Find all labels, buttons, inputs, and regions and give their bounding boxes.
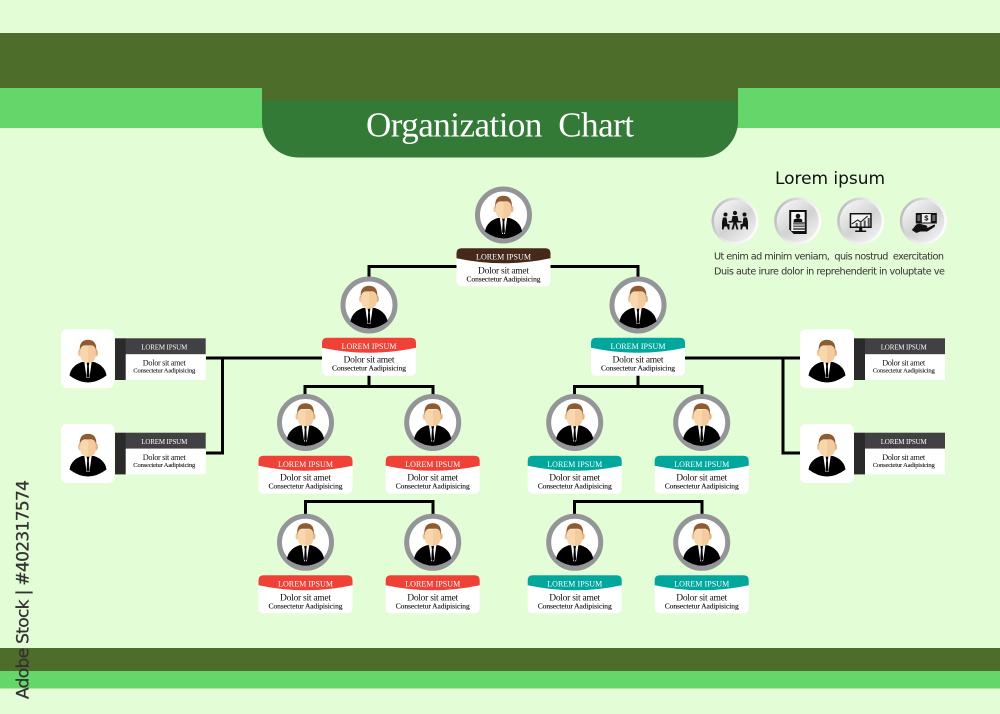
photo tile bbox=[61, 329, 114, 388]
side card: Dolor sit amet bbox=[882, 359, 926, 368]
side node: left upper bbox=[61, 329, 206, 388]
card: Dolor sit amet bbox=[407, 474, 459, 484]
card bbox=[655, 456, 749, 494]
card bbox=[528, 456, 622, 494]
card bbox=[386, 575, 480, 613]
side card: Consectetur Aadipisicing bbox=[873, 462, 935, 469]
card bbox=[456, 248, 550, 286]
card: Consectetur Aadipisicing bbox=[538, 482, 612, 491]
card: Consectetur Aadipisicing bbox=[665, 482, 739, 491]
node: left manager bbox=[322, 279, 416, 376]
card: Dolor sit amet bbox=[344, 356, 395, 366]
card bbox=[655, 575, 749, 613]
card: Consectetur Aadipisicing bbox=[332, 364, 406, 373]
side card bbox=[115, 338, 206, 380]
top header band: light right bbox=[737, 88, 1000, 128]
icon: money in hand bbox=[900, 198, 947, 244]
title: Organization Chart bbox=[366, 106, 634, 144]
side card bbox=[115, 433, 206, 474]
info heading: Lorem ipsum bbox=[775, 169, 885, 189]
node: teal level 4 right bbox=[655, 516, 749, 613]
card: Consectetur Aadipisicing bbox=[396, 482, 470, 491]
card bbox=[258, 456, 352, 494]
card: Consectetur Aadipisicing bbox=[268, 482, 343, 491]
card: LOREM IPSUM bbox=[278, 460, 333, 469]
card: LOREM IPSUM bbox=[674, 580, 729, 589]
avatar bbox=[280, 396, 332, 448]
side card: LOREM IPSUM bbox=[881, 343, 927, 351]
icon: money in hand: $ bbox=[924, 214, 929, 222]
card: Dolor sit amet bbox=[676, 474, 728, 484]
side card: Consectetur Aadipisicing bbox=[133, 462, 196, 469]
side node: right lower bbox=[800, 424, 945, 483]
avatar bbox=[612, 279, 664, 331]
photo tile bbox=[800, 424, 854, 483]
icon: monitor chart bbox=[837, 198, 884, 244]
card: Consectetur Aadipisicing bbox=[601, 364, 675, 373]
avatar bbox=[478, 189, 530, 241]
icon: meeting bbox=[712, 198, 758, 244]
card: LOREM IPSUM bbox=[476, 253, 531, 262]
card: LOREM IPSUM bbox=[610, 342, 666, 351]
bottom band: light bbox=[0, 671, 1000, 688]
node: red level 3 right bbox=[386, 396, 480, 494]
side card: Dolor sit amet bbox=[882, 453, 926, 462]
info text line 2: Duis aute irure dolor in reprehenderit in voluptate ve bbox=[714, 266, 945, 278]
avatar bbox=[549, 516, 601, 568]
card: LOREM IPSUM bbox=[405, 580, 460, 589]
side card: LOREM IPSUM bbox=[881, 438, 927, 446]
card: Dolor sit amet bbox=[280, 474, 331, 484]
card bbox=[258, 575, 352, 613]
card: LOREM IPSUM bbox=[547, 460, 602, 469]
info text line 1: Ut enim ad minim veniam, quis nostrud exercitation bbox=[714, 252, 944, 262]
vertical stock label: Adobe Stock | #402317574 bbox=[14, 480, 34, 699]
node: right manager bbox=[591, 279, 685, 376]
bottom band: dark bbox=[0, 648, 1000, 671]
node: red level 4 left bbox=[258, 516, 352, 613]
info panel bbox=[712, 169, 947, 278]
side card: Consectetur Aadipisicing bbox=[133, 368, 196, 375]
icon: resume document bbox=[774, 198, 821, 244]
side card: Dolor sit amet bbox=[143, 359, 187, 368]
side card: Dolor sit amet bbox=[143, 453, 187, 462]
side card: LOREM IPSUM bbox=[141, 438, 188, 446]
node: top bbox=[456, 189, 550, 286]
node: teal level 4 left bbox=[528, 516, 622, 613]
card bbox=[528, 575, 622, 613]
card: Dolor sit amet bbox=[549, 474, 601, 484]
top header band: light left bbox=[0, 88, 263, 128]
node: red level 4 right bbox=[386, 516, 480, 613]
side node: left lower bbox=[61, 424, 206, 483]
connector lines bbox=[206, 266, 800, 515]
card: Consectetur Aadipisicing bbox=[538, 601, 612, 610]
card: Consectetur Aadipisicing bbox=[466, 274, 541, 283]
card: Dolor sit amet bbox=[676, 593, 728, 603]
top header band: dark bbox=[0, 33, 1000, 88]
card: Dolor sit amet bbox=[478, 266, 529, 276]
node: teal level 3 right bbox=[655, 396, 749, 494]
card: LOREM IPSUM bbox=[342, 342, 396, 351]
card: LOREM IPSUM bbox=[674, 460, 729, 469]
avatar bbox=[407, 516, 459, 568]
card: LOREM IPSUM bbox=[405, 460, 460, 469]
card: Dolor sit amet bbox=[407, 593, 459, 603]
side card bbox=[854, 338, 945, 380]
card: LOREM IPSUM bbox=[278, 580, 333, 589]
card: Consectetur Aadipisicing bbox=[396, 601, 470, 610]
side card: LOREM IPSUM bbox=[141, 343, 188, 351]
node: teal level 3 left bbox=[528, 396, 622, 494]
card bbox=[591, 338, 685, 376]
card: Dolor sit amet bbox=[612, 356, 664, 366]
card: Dolor sit amet bbox=[549, 593, 601, 603]
card bbox=[386, 456, 480, 494]
side node: right upper bbox=[800, 329, 945, 388]
card bbox=[322, 338, 416, 376]
card: Dolor sit amet bbox=[280, 593, 331, 603]
card: Consectetur Aadipisicing bbox=[665, 601, 739, 610]
photo tile bbox=[800, 329, 854, 388]
photo tile bbox=[61, 424, 114, 483]
avatar bbox=[676, 396, 728, 448]
side card: Consectetur Aadipisicing bbox=[873, 368, 935, 375]
avatar bbox=[343, 279, 395, 331]
title tab bbox=[262, 88, 738, 158]
side card bbox=[854, 433, 945, 474]
avatar bbox=[676, 516, 728, 568]
avatar bbox=[280, 516, 332, 568]
avatar bbox=[407, 396, 459, 448]
card: LOREM IPSUM bbox=[547, 580, 602, 589]
node: red level 3 left bbox=[258, 396, 352, 494]
card: Consectetur Aadipisicing bbox=[268, 601, 343, 610]
avatar bbox=[549, 396, 601, 448]
